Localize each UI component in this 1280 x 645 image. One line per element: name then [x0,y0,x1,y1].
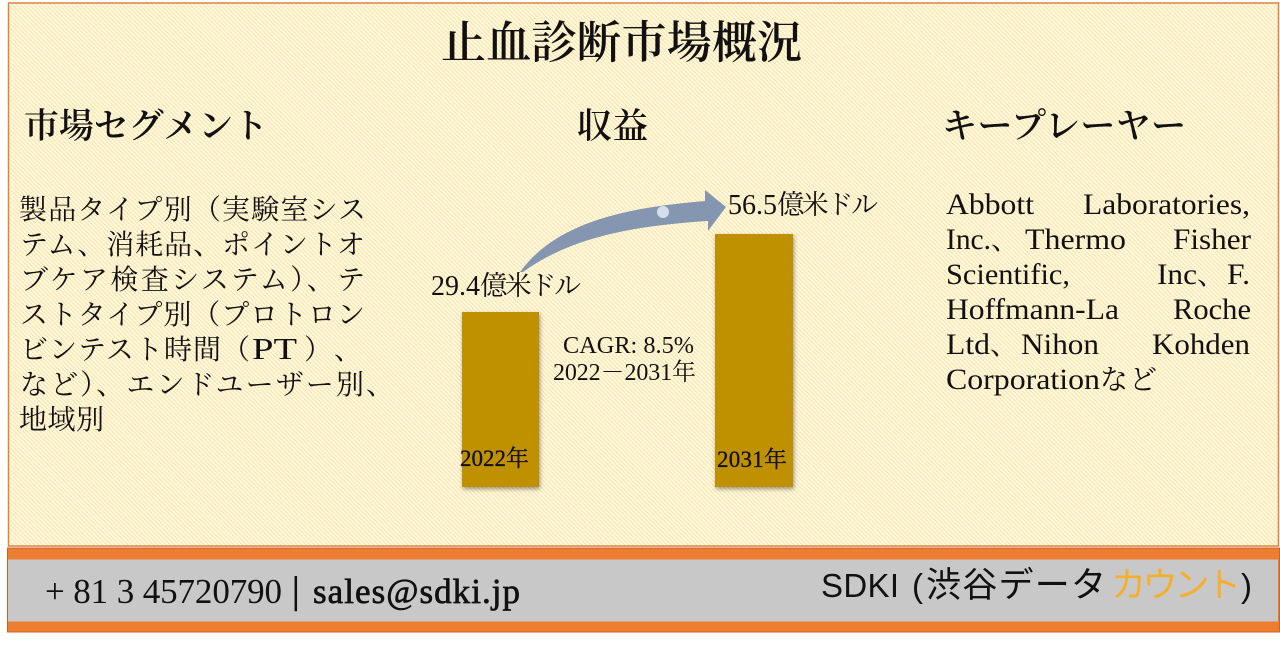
chart: revenue growth [431,190,878,487]
text block: key players: 、 [991,225,1019,256]
text block: market segments: ）、 [304,334,362,366]
text block: key players: F. [1227,258,1250,291]
text block: key players: Inc [1157,258,1197,291]
text block: key players: Hoffmann-La [946,293,1119,326]
label: CAGR: CAGR: 8.5% [563,333,694,359]
text block: key players: Kohden [1152,328,1250,361]
text block: key players: など [1100,365,1157,396]
text block: market segments: ビンテスト時間（ [20,334,250,366]
label: 2031 value [728,190,878,221]
label: 2031 year: 2031年 [717,447,787,472]
text block: key players: 、 [990,330,1018,361]
text block: market segments: 製品タイプ別（実験室シス [19,194,366,226]
label: 2022 value [431,271,581,302]
text block: market segments: 地域別 [19,404,104,436]
company name: ) [1241,567,1252,604]
heading: key players: キープレーヤー [942,107,1186,146]
contact details: + 81 3 45720790 [45,572,282,611]
text block: key players [946,188,1251,396]
text block: key players: Ltd [946,328,990,361]
text block: key players: Corporation [946,363,1100,396]
text block: key players: Scientific, [946,258,1070,291]
company name: SDKI [821,567,899,604]
arrow: growth [520,190,726,272]
label: 2022 year: 2022年 [460,446,529,471]
title: 止血診断市場概況 [441,18,802,68]
arrow highlight dot [657,206,669,218]
label: 2022 value: 億米ドル [480,271,581,301]
label: 2031 value: 56.5 [728,190,777,221]
text block: key players: Nihon [1021,328,1099,361]
heading: market segments: 市場セグメント [24,107,268,146]
bar: 2022 [462,312,539,487]
bar: 2031 [715,234,793,487]
text block: market segments: ストタイプ別（プロトロン [20,299,365,331]
company name: 渋谷データ [926,566,1106,605]
footer bar [8,548,1280,632]
label: 2031 value: 億米ドル [777,190,878,220]
text block: market segments: テム、消耗品、ポイントオ [20,229,365,261]
text block: key players: Inc. [946,223,991,256]
text block: key players: Abbott [946,188,1035,221]
text block: key players: Thermo [1025,223,1126,256]
text block: key players: Roche [1173,293,1251,326]
text block: market segments: ブケア検査システム）、テ [20,264,365,296]
contact details: sales@sdki.jp [313,572,520,611]
text block: key players: 、 [1197,260,1225,291]
company name: カウント [1111,566,1241,605]
label: 2022 value: 29.4 [431,271,480,302]
text block: key players: Fisher [1173,223,1251,256]
text block: market segments [19,194,394,436]
company name: ( [912,567,923,604]
text block: market segments: PT [252,331,297,366]
text block: market segments: など）、エンドユーザー別、 [20,369,394,401]
text block: key players: Laboratories, [1083,188,1250,221]
contact details: | [292,570,300,612]
label: period: 2022－2031年 [553,359,696,386]
heading: revenue: 収益 [577,107,648,146]
footer inner band [8,560,1278,622]
